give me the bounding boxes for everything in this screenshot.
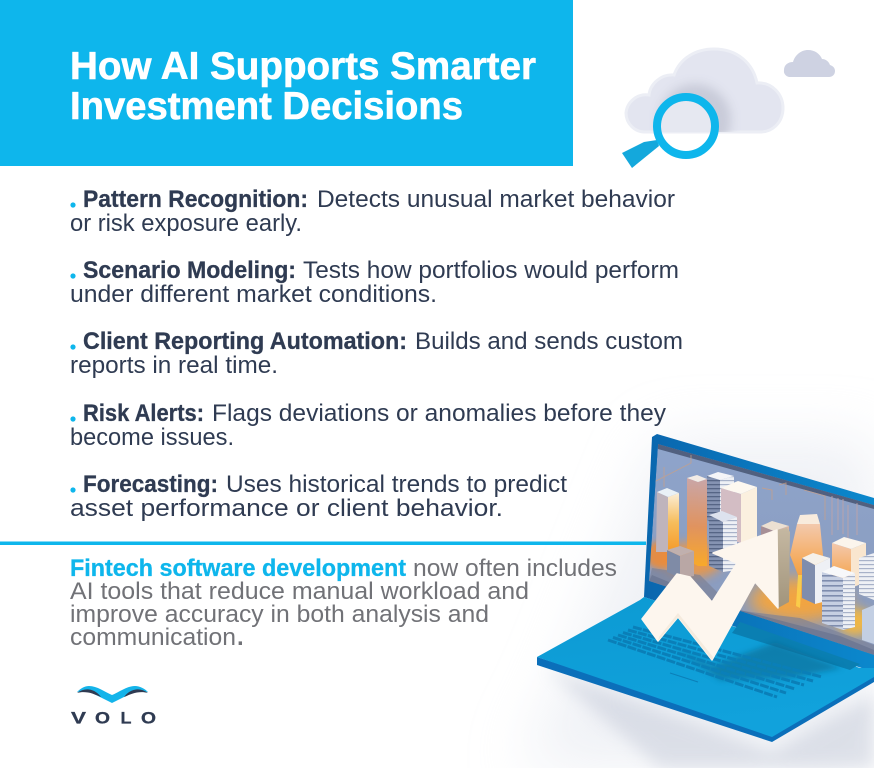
logo: Volo: L bbox=[120, 708, 132, 728]
towers bbox=[656, 492, 668, 552]
icon: small cloud bbox=[784, 50, 835, 77]
logo: Volo bbox=[71, 686, 156, 728]
circuit lines bbox=[654, 455, 825, 520]
rising arrow bbox=[642, 528, 790, 660]
laptop screen with city bbox=[646, 444, 874, 655]
bullet: scenario modeling: Tests how portfolios would perform bbox=[303, 257, 679, 284]
closing paragraph: improve accuracy in both analysis and bbox=[70, 601, 489, 628]
bullet: risk alerts bbox=[70, 400, 666, 451]
closing paragraph: now often includes bbox=[413, 555, 617, 582]
bullet: client reporting automation: Client Reporting Automation: bbox=[83, 328, 407, 355]
closing paragraph bbox=[70, 555, 617, 651]
bullet: pattern recognition: or risk exposure early. bbox=[70, 210, 302, 237]
bullet: forecasting bbox=[70, 471, 567, 522]
city glow bbox=[750, 578, 850, 622]
closing paragraph: Fintech software development bbox=[70, 555, 406, 582]
laptop lid bbox=[644, 434, 874, 672]
bullet: forecasting: Forecasting: bbox=[83, 471, 218, 498]
arrow shadow bbox=[672, 642, 842, 680]
title: Investment Decisions bbox=[70, 85, 463, 128]
bullet: risk alerts: Flags deviations or anomalies before they bbox=[212, 400, 666, 427]
logo: Volo: O bbox=[141, 708, 156, 728]
bullet: pattern recognition bbox=[70, 186, 675, 237]
bullet: pattern recognition: Detects unusual market behavior bbox=[317, 186, 675, 213]
closing paragraph: AI tools that reduce manual workload and bbox=[70, 578, 529, 605]
closing paragraph: . bbox=[237, 624, 244, 651]
logo: Volo: V bbox=[71, 708, 87, 728]
bullet: client reporting automation bbox=[70, 328, 683, 379]
bullet: forecasting: asset performance or client behavior. bbox=[70, 495, 503, 522]
laptop base top bbox=[537, 597, 874, 737]
laptop shadow bbox=[561, 676, 874, 768]
glow sparks and street bbox=[796, 575, 802, 608]
bullet: scenario modeling: Scenario Modeling: bbox=[83, 257, 296, 284]
bullet: risk alerts: become issues. bbox=[70, 424, 234, 451]
bullet: client reporting automation: reports in real time. bbox=[70, 352, 278, 379]
bullet: client reporting automation: Builds and sends custom bbox=[415, 328, 683, 355]
header banner bbox=[0, 0, 573, 166]
keyboard bbox=[608, 627, 822, 697]
hinge dark band bbox=[732, 622, 860, 670]
page background glow bbox=[547, 440, 873, 767]
logo: Volo: O bbox=[95, 708, 110, 728]
bullet: scenario modeling bbox=[70, 257, 679, 308]
title bbox=[70, 45, 536, 128]
bullet: forecasting: Uses historical trends to predict bbox=[226, 471, 567, 498]
ground bbox=[649, 568, 874, 655]
bullet: risk alerts: Risk Alerts: bbox=[83, 400, 204, 427]
divider line bbox=[0, 542, 646, 545]
bullet: pattern recognition: Pattern Recognition: bbox=[83, 186, 308, 213]
closing paragraph: communication bbox=[70, 624, 236, 651]
laptop base front edge bbox=[537, 657, 874, 742]
bullet: scenario modeling: under different market conditions. bbox=[70, 281, 437, 308]
icon: cloud with magnifying glass bbox=[622, 49, 783, 168]
illustration: laptop with rising arrow bbox=[537, 434, 874, 768]
title: How AI Supports Smarter bbox=[70, 45, 536, 88]
trackpad mark bbox=[670, 673, 698, 682]
